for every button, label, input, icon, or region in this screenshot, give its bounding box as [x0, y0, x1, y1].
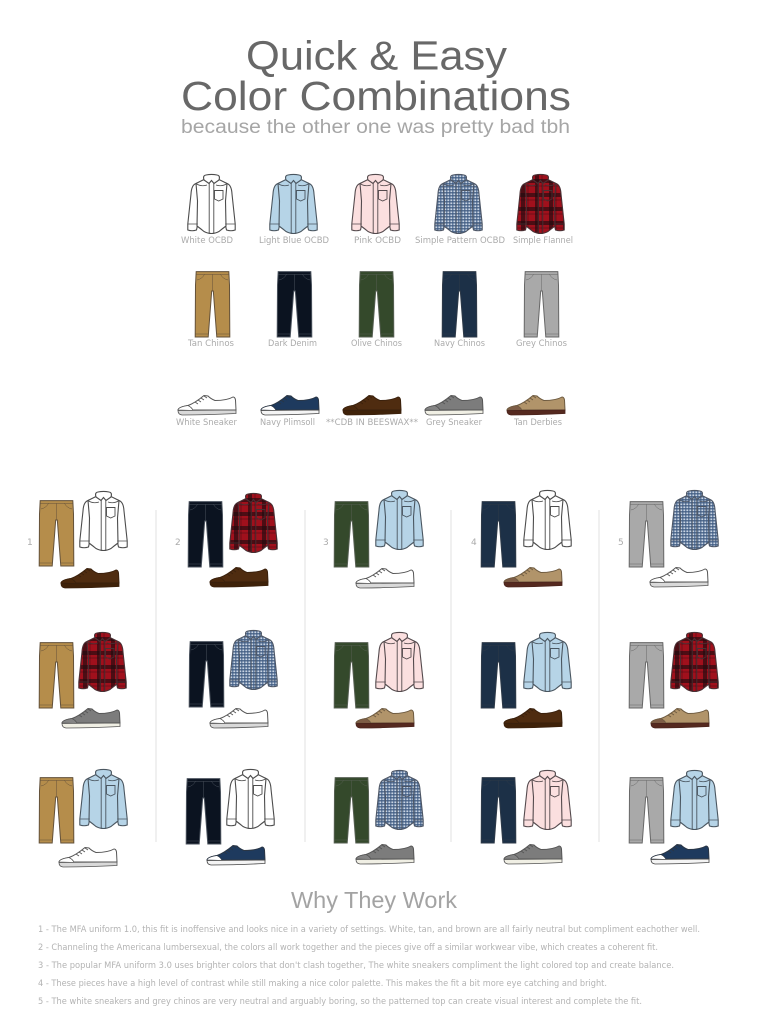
outfit 1a: [39, 491, 127, 588]
item: CDB in beeswax: [326, 396, 418, 428]
item: navy plimsoll: Navy Plimsoll: [260, 418, 315, 428]
item: grey sneaker: [425, 396, 483, 428]
outfit 3b: [334, 632, 423, 728]
heading: why they work: Why They Work: [291, 887, 458, 913]
panel: shoes catalog: [176, 396, 565, 428]
item: white OCBD: [181, 174, 235, 246]
item: pink OCBD: Pink OCBD: [354, 236, 401, 246]
outfit 5a: [629, 490, 718, 587]
item: light blue OCBD: Light Blue OCBD: [259, 236, 329, 246]
item: white sneaker: [176, 396, 237, 428]
item: grey chinos: Grey Chinos: [516, 339, 567, 349]
panel: pants catalog: [187, 272, 567, 349]
item: grey chinos: [516, 272, 567, 349]
number 5: 5: [618, 538, 624, 548]
number 1: 1: [27, 538, 33, 548]
outfit 4b: [481, 632, 571, 728]
title: [181, 32, 571, 119]
item: tan chinos: Tan Chinos: [187, 339, 234, 349]
number 2: 2: [175, 538, 181, 548]
number 3: 3: [323, 538, 329, 548]
text block: explanations: 3 - The popular MFA uniform 3.0 uses brighter colors that don't clash together, The white sneakers compliment the light colored top and create balance.: [38, 961, 674, 971]
text block: explanations: 1 - The MFA uniform 1.0, this fit is inoffensive and looks nice in a variety of settings. White, tan, and brown are all fairly neutral but compliment eachother well.: [38, 925, 700, 935]
title: Quick & Easy: [246, 32, 508, 78]
item: CDB in beeswax: **CDB IN BEESWAX**: [326, 418, 418, 428]
item: navy chinos: [434, 272, 485, 349]
subtitle: because the other one was pretty bad tbh: [181, 117, 570, 138]
panel: outfit column 1: [27, 491, 127, 867]
item: tan derbies: Tan Derbies: [513, 418, 562, 428]
item: olive chinos: Olive Chinos: [351, 339, 402, 349]
item: tan derbies: [507, 396, 565, 428]
outfit 4c: [481, 770, 571, 864]
text block: explanations: 2 - Channeling the Americana lumbersexual, the colors all work together and the pieces give off a similar workwear vibe, which creates a coherent fit.: [38, 943, 658, 953]
text block: explanations: [38, 925, 700, 1007]
outfit 4a: [481, 490, 571, 587]
item: white sneaker: White Sneaker: [176, 418, 237, 428]
item: pink OCBD: [352, 174, 401, 246]
panel: outfit column 3: [323, 490, 423, 864]
item: olive chinos: [351, 272, 402, 349]
item: dark denim: Dark Denim: [268, 339, 317, 349]
item: simple pattern OCBD: Simple Pattern OCBD: [415, 236, 505, 246]
item: white OCBD: White OCBD: [181, 236, 233, 246]
panel: outfit column 4: [471, 490, 571, 864]
item: tan chinos: [187, 272, 234, 349]
item: navy plimsoll: [260, 396, 319, 428]
panel: outfit column 2: [175, 493, 277, 865]
number 4: 4: [471, 538, 477, 548]
outfit 5c: [629, 770, 718, 864]
item: navy chinos: Navy Chinos: [434, 339, 485, 349]
item: dark denim: [268, 272, 317, 349]
outfit 2b: [189, 630, 277, 728]
outfit 1c: [39, 769, 127, 867]
item: light blue OCBD: [259, 174, 329, 246]
outfit 3c: [334, 770, 423, 864]
item: simple pattern OCBD: [415, 174, 505, 246]
text block: explanations: 4 - These pieces have a high level of contrast while still making a nice color palette. This makes the fit a bit more eye catching and bright.: [38, 979, 607, 989]
outfit 3a: [334, 490, 423, 588]
panel: shirt catalog: [181, 174, 573, 246]
outfit 2a: [188, 493, 277, 587]
outfit 1b: [39, 632, 126, 728]
item: grey sneaker: Grey Sneaker: [426, 418, 482, 428]
outfit 2c: [186, 769, 274, 865]
title: Color Combinations: [181, 73, 571, 119]
item: simple flannel: Simple Flannel: [513, 236, 573, 246]
panel: outfit column 5: [618, 490, 718, 864]
outfit 5b: [629, 632, 718, 728]
text block: explanations: 5 - The white sneakers and grey chinos are very neutral and arguably boring, so the patterned top can create visual interest and complete the fit.: [38, 997, 642, 1007]
item: simple flannel: [513, 174, 573, 246]
